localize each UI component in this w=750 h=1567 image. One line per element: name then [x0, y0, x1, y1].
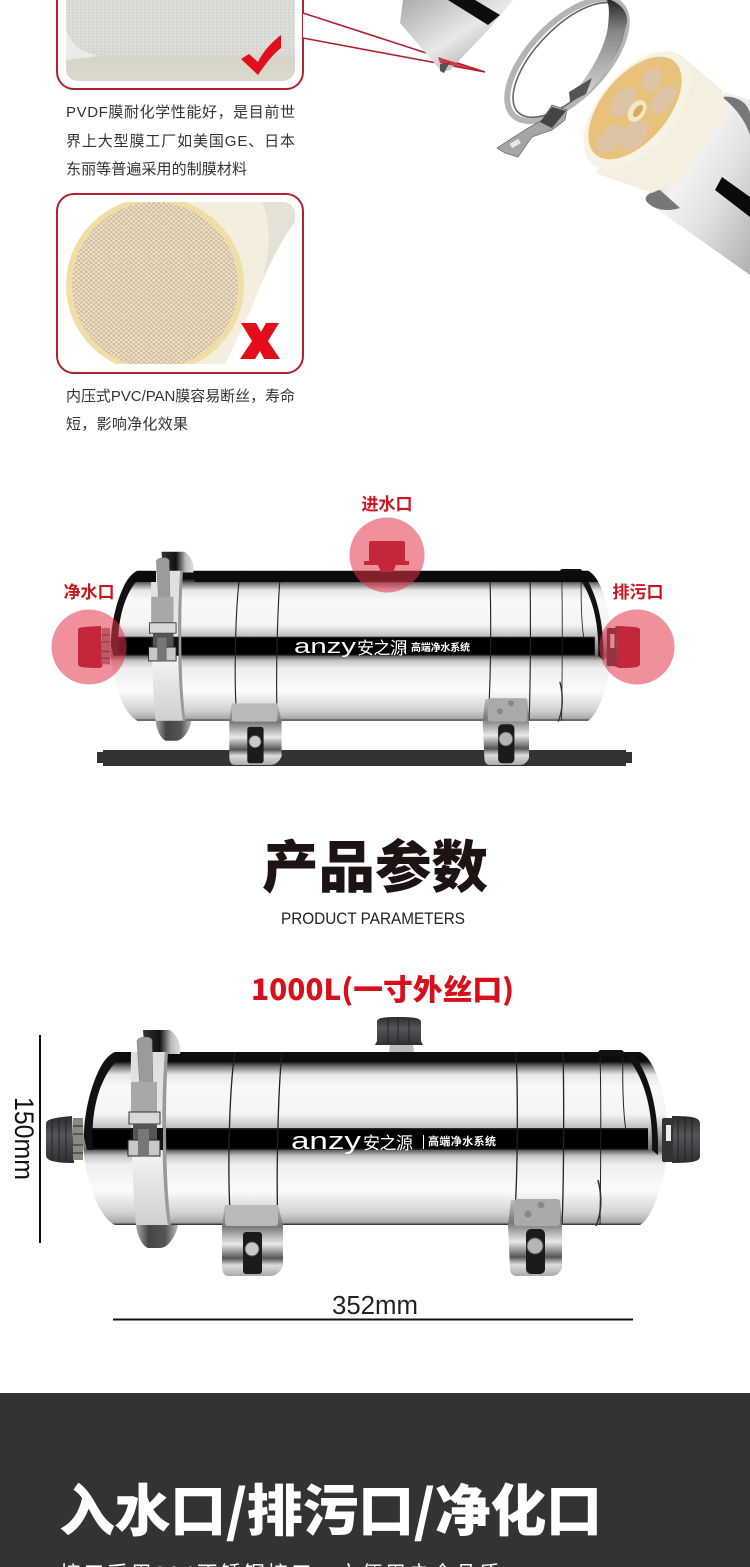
exploded view: filter assembly: [400, 0, 750, 275]
logo text: 安之源: [357, 639, 407, 658]
logo text: [294, 636, 470, 658]
filter cartridge: [563, 32, 727, 193]
dimension: length: 352mm: [332, 1292, 418, 1320]
heading: ports: 入水口/排污口/净化口: [59, 1467, 602, 1548]
panel: PVC/PAN membrane (bad): [57, 194, 303, 373]
label: drain outlet: 排污口: [612, 583, 664, 602]
icon: red cross: [240, 323, 280, 359]
logo text: 高端净水系统: [411, 641, 470, 654]
heading: product parameters: 产品参数: [262, 822, 488, 904]
logo text: 高端净水系统: [428, 1134, 496, 1148]
outlet knob: right: [618, 626, 640, 668]
dimension: height: 150mm: [9, 1097, 39, 1180]
panel: PVDF membrane (good): [57, 0, 303, 89]
upper black reflection: [127, 571, 598, 582]
inlet knob: [364, 541, 409, 572]
highlight: drain outlet: [600, 610, 674, 684]
text: PVDF description: PVDF膜耐化学性能好，是目前世: [66, 104, 295, 121]
text: PVDF description: [66, 104, 295, 178]
steel housing tube: [646, 92, 750, 275]
text: PVC/PAN description: 内压式PVC/PAN膜容易断丝，寿命: [66, 387, 295, 405]
right-hand bands and foot: [483, 569, 584, 765]
subheading: PRODUCT PARAMETERS: [281, 909, 465, 928]
right-hand bands and foot: [508, 1050, 626, 1276]
label: clean water outlet: 净水口: [64, 583, 114, 602]
panel border: [57, 194, 303, 373]
product photo: port locations: [52, 495, 674, 766]
logo text: anzy: [291, 1128, 361, 1155]
text: PVDF description: 东丽等普遍采用的制膜材料: [66, 160, 247, 178]
base shelf: [97, 750, 632, 766]
logo text: [291, 1128, 496, 1155]
highlight: inlet: [350, 518, 424, 592]
text: PVDF description: 界上大型膜工厂如美国GE、日本: [66, 133, 295, 150]
panel border: [57, 0, 303, 89]
logo text: 安之源: [363, 1134, 413, 1153]
text: PVC/PAN description: [66, 387, 295, 433]
text: PVC/PAN description: 短，影响净化效果: [66, 416, 188, 433]
icon: red check mark: [241, 35, 281, 75]
dark footer panel: [0, 1393, 750, 1567]
red callout tip over cap: [438, 57, 485, 72]
outlet knob: left: [78, 626, 101, 668]
logo text: anzy: [294, 636, 356, 658]
product photo: dimensions: [46, 1017, 700, 1276]
photo: hollow fiber bundle: [66, 197, 295, 373]
model label: 1000L(一寸外丝口): [251, 967, 514, 1009]
highlight: clean water outlet: [52, 610, 126, 684]
clamp ring: [487, 0, 647, 157]
stainless tank: [78, 552, 639, 765]
top knob: [375, 1017, 423, 1052]
label: inlet: 进水口: [362, 495, 412, 514]
stainless tank: [46, 1030, 700, 1276]
tank end cap: [400, 0, 513, 73]
callout lines: [303, 13, 485, 72]
photo: PVDF fiber membrane: [66, 0, 295, 81]
